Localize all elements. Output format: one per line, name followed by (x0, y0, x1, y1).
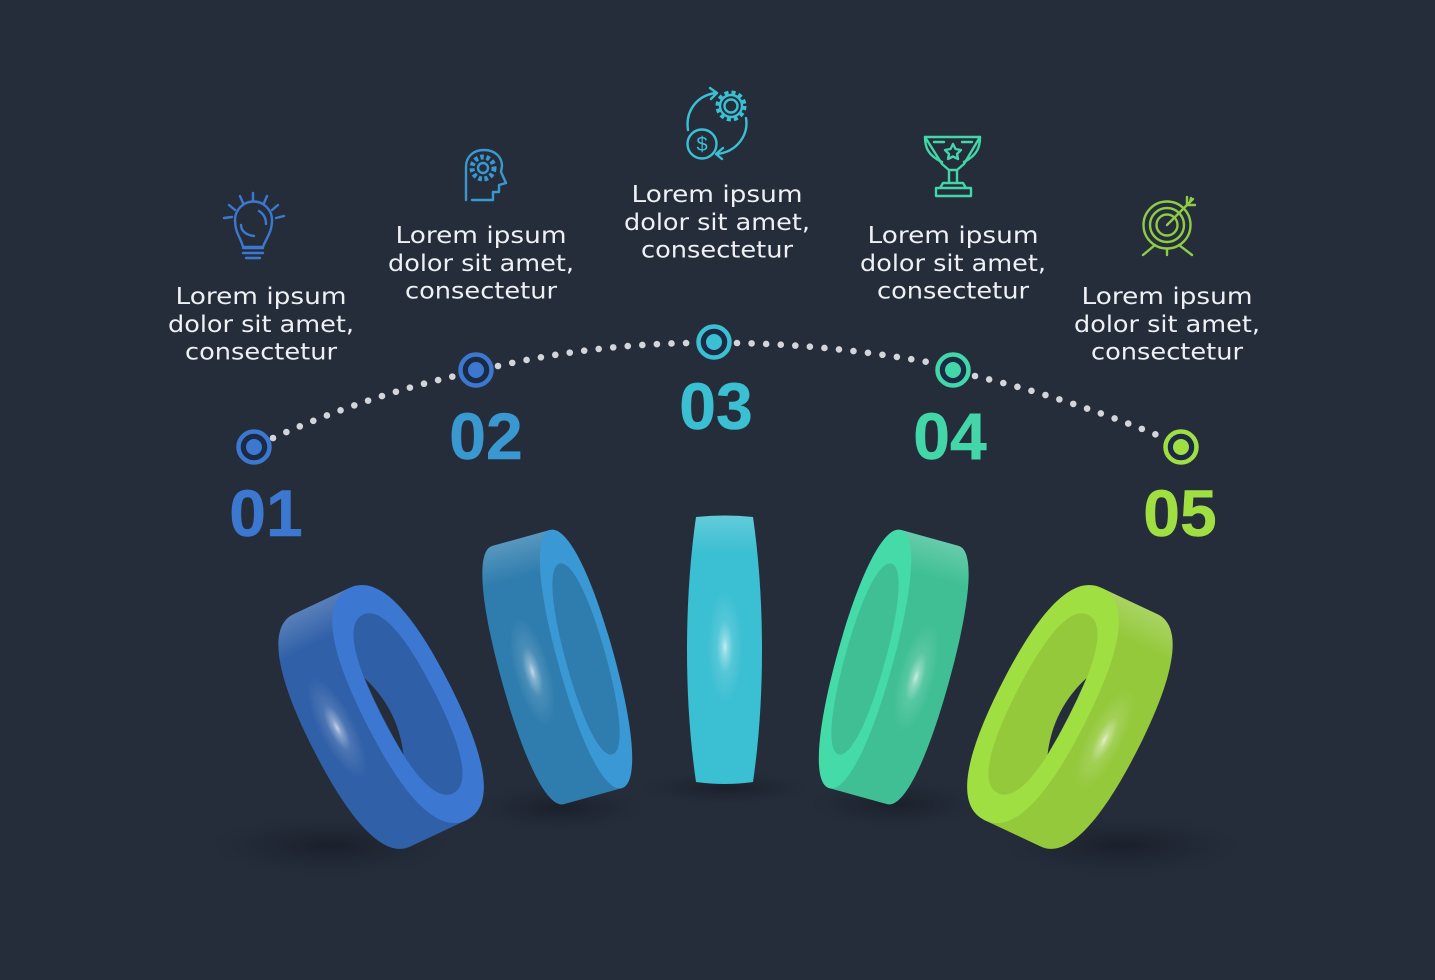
text block 01: consectetur (185, 340, 338, 366)
text block 05: Lorem ipsum (1082, 284, 1252, 310)
icon: head with gear (466, 150, 506, 200)
text block 03: consectetur (641, 238, 794, 264)
marker 01 (238, 432, 270, 462)
text block 03 (624, 182, 810, 264)
ring 01 (255, 566, 508, 867)
text block 03: dolor sit amet, (624, 210, 810, 236)
number 04: 04 (913, 399, 987, 473)
text block 05: dolor sit amet, (1074, 312, 1260, 338)
ring 04 (802, 522, 985, 811)
text block 02: consectetur (405, 278, 558, 304)
icon: target with arrow (1143, 197, 1195, 255)
text block 05: consectetur (1091, 340, 1244, 366)
ground shadows (210, 772, 1242, 876)
number 05: 05 (1143, 476, 1217, 550)
text block 04: Lorem ipsum (868, 223, 1038, 249)
text block 04: consectetur (877, 278, 1030, 304)
text block 02 (388, 223, 574, 304)
text block 05 (1074, 284, 1260, 366)
text block 04: dolor sit amet, (860, 251, 1046, 277)
marker 03 (698, 326, 730, 358)
icon: light bulb (224, 193, 284, 258)
text block 02: Lorem ipsum (396, 223, 566, 249)
icon: trophy (925, 137, 980, 196)
ring 05 (943, 566, 1196, 867)
text block 04 (860, 223, 1046, 304)
text block 01: dolor sit amet, (168, 312, 354, 338)
ring 03 (687, 516, 762, 784)
icon: gear and money cycle (688, 88, 746, 159)
text block 02: dolor sit amet, (388, 251, 574, 277)
text block 03: Lorem ipsum (632, 182, 802, 208)
marker 04 (938, 354, 968, 386)
icon: gear and money cycle: $ (696, 134, 708, 156)
number 02: 02 (449, 399, 523, 473)
dotted arc connecting the markers (273, 343, 1162, 438)
number 03: 03 (679, 369, 753, 443)
number 01: 01 (229, 476, 303, 550)
ring 02 (466, 522, 649, 811)
text block 01 (168, 284, 354, 366)
marker 02 (460, 354, 492, 386)
text block 01: Lorem ipsum (176, 284, 346, 310)
marker 05 (1166, 432, 1196, 462)
